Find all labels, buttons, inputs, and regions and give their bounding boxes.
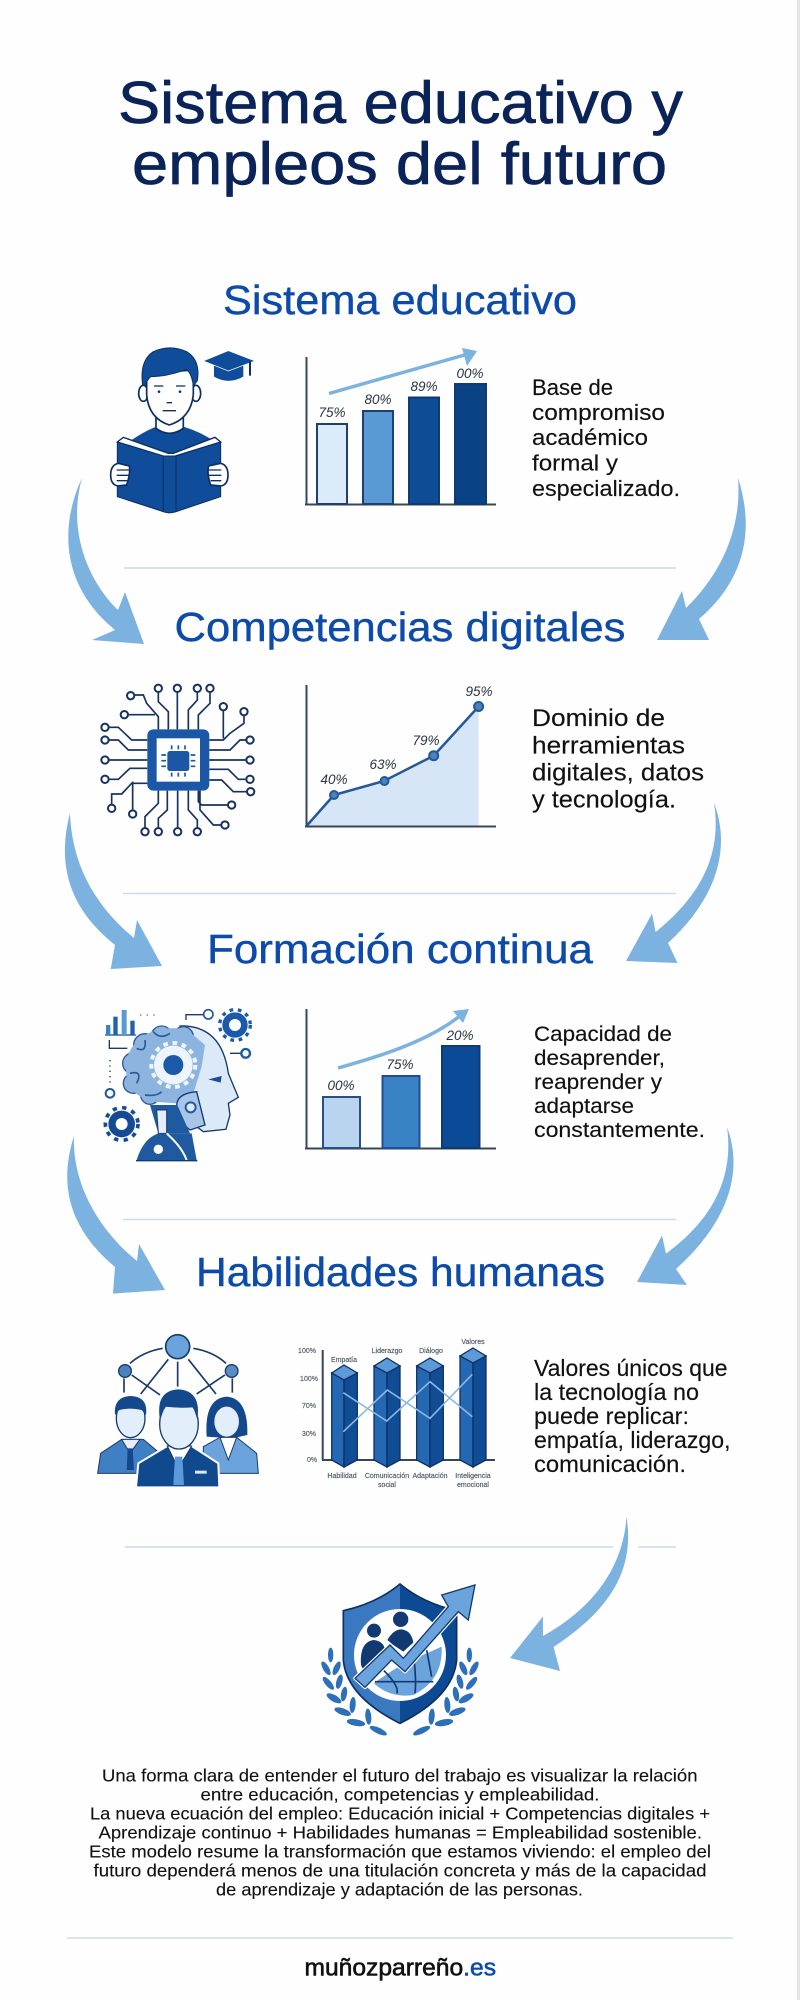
icon: robot head with brain and gears — [105, 1010, 250, 1161]
text: valores unicos: empatía, liderazgo, — [534, 1427, 730, 1453]
bar chart: 3d prisms with crossing lines: Inteligencia — [455, 1473, 491, 1480]
bar chart: rising with arrow: 20% — [445, 1028, 474, 1043]
text: base de compromiso: compromiso — [532, 400, 665, 425]
text: valores unicos — [534, 1355, 730, 1477]
arrow: left, competencias digitales to formacion continua — [65, 813, 162, 969]
heading: sistema educativo: Sistema educativo — [223, 277, 577, 323]
text: valores unicos: la tecnología no — [534, 1379, 699, 1405]
arrow: right, competencias digitales to formacion continua — [626, 803, 721, 963]
heading: habilidades humanas: Habilidades humanas — [196, 1249, 605, 1295]
bar chart: 3d prisms with crossing lines — [298, 1339, 495, 1489]
bar chart: 75 to 90 percent: 00% — [456, 366, 484, 381]
text: capacidad de desaprender: constantemente. — [534, 1118, 705, 1142]
area chart: 40 to 95 percent: 63% — [369, 757, 397, 772]
text: dominio de herramientas — [532, 705, 704, 814]
closing paragraph: La nueva ecuación del empleo: Educación inicial + Competencias digitales + — [90, 1804, 710, 1824]
text: dominio de herramientas: digitales, datos — [532, 760, 704, 786]
arrow: left, sistema educativo to competencias digitales — [68, 478, 144, 644]
bar chart: 3d prisms with crossing lines: emocional — [457, 1482, 489, 1489]
closing paragraph: entre educación, competencias y empleabilidad. — [200, 1784, 600, 1804]
bar chart: 75 to 90 percent: 75% — [318, 405, 346, 420]
arrow: habilidades humanas to badge — [510, 1517, 628, 1671]
bar chart: 3d prisms with crossing lines: Diálogo — [419, 1348, 443, 1355]
bar chart: rising with arrow — [305, 1009, 496, 1149]
bar chart: 3d prisms with crossing lines: Adaptación — [412, 1473, 448, 1480]
bar chart: 3d prisms with crossing lines: Valores — [461, 1339, 485, 1346]
text: base de compromiso: académico — [532, 425, 648, 450]
closing paragraph: de aprendizaje y adaptación de las personas. — [216, 1880, 583, 1900]
panel: formacion continua — [105, 926, 705, 1161]
title — [118, 70, 684, 197]
bar chart: rising with arrow: 75% — [386, 1057, 414, 1072]
bar chart: 3d prisms with crossing lines: 70% — [302, 1403, 316, 1410]
text: valores unicos: Valores únicos que — [534, 1355, 728, 1381]
text: base de compromiso: formal y — [532, 450, 618, 476]
closing paragraph: Este modelo resume la transformación que estamos viviendo: el empleo del — [89, 1842, 711, 1862]
panel: habilidades humanas — [98, 1249, 730, 1489]
closing paragraph: Aprendizaje continuo + Habilidades humanas = Empleabilidad sostenible. — [98, 1822, 702, 1842]
bar chart: 3d prisms with crossing lines: 30% — [302, 1431, 316, 1438]
closing paragraph — [89, 1766, 711, 1900]
text: valores unicos: comunicación. — [534, 1451, 686, 1477]
arrow: left, formacion continua to habilidades humanas — [67, 1136, 165, 1294]
area chart: 40 to 95 percent: 95% — [465, 684, 493, 699]
text: capacidad de desaprender: adaptarse — [534, 1094, 634, 1118]
closing paragraph: futuro dependerá menos de una titulación concreta y más de la capacidad — [94, 1860, 706, 1880]
text: capacidad de desaprender — [534, 1022, 705, 1142]
area chart: 40 to 95 percent — [305, 684, 496, 827]
bar chart: 3d prisms with crossing lines: 100% — [298, 1348, 316, 1355]
icon: student reading a book with graduation cap — [111, 348, 255, 513]
text: capacidad de desaprender: desaprender, — [534, 1046, 665, 1070]
text: base de compromiso: especializado. — [532, 476, 680, 501]
heading: competencias digitales: Competencias digitales — [174, 604, 626, 650]
area chart: 40 to 95 percent: 40% — [320, 772, 348, 787]
bar chart: 75 to 90 percent — [305, 348, 496, 505]
text: dominio de herramientas: Dominio de — [532, 705, 665, 732]
bar chart: 3d prisms with crossing lines: 0% — [307, 1457, 317, 1464]
text: capacidad de desaprender: Capacidad de — [534, 1022, 672, 1046]
title: Sistema educativo y — [118, 70, 684, 136]
bar chart: 3d prisms with crossing lines: Habilidad — [327, 1473, 357, 1480]
bar chart: 3d prisms with crossing lines: Empatía — [331, 1357, 357, 1364]
bar chart: 3d prisms with crossing lines: Liderazgo — [372, 1348, 402, 1355]
text: dominio de herramientas: herramientas — [532, 732, 685, 760]
text: valores unicos: puede replicar: — [534, 1403, 689, 1429]
bar chart: 75 to 90 percent: 80% — [364, 392, 392, 407]
footer brand: muñozparreño.es — [304, 1954, 496, 1982]
text: dominio de herramientas: y tecnología. — [532, 786, 676, 814]
panel: competencias digitales — [101, 604, 704, 835]
bar chart: 3d prisms with crossing lines: 100% — [300, 1376, 318, 1383]
heading: formacion continua: Formación continua — [207, 926, 593, 972]
icon: shield badge with rising arrow, people, globe and laurels — [320, 1584, 480, 1737]
icon: circuit chip — [101, 685, 254, 835]
bar chart: 3d prisms with crossing lines: social — [378, 1482, 396, 1489]
arrow: right, sistema educativo to competencias digitales — [657, 478, 746, 640]
bar chart: 3d prisms with crossing lines: Comunicación — [365, 1473, 409, 1480]
bar chart: 75 to 90 percent: 89% — [410, 379, 438, 394]
arrow: right, formacion continua to habilidades humanas — [637, 1127, 734, 1285]
text: capacidad de desaprender: reaprender y — [534, 1070, 662, 1094]
bar chart: rising with arrow: 00% — [327, 1078, 355, 1093]
text: base de compromiso — [532, 375, 680, 501]
text: base de compromiso: Base de — [532, 375, 613, 400]
panel: sistema educativo — [111, 277, 680, 513]
area chart: 40 to 95 percent: 79% — [412, 733, 440, 748]
closing paragraph: Una forma clara de entender el futuro del trabajo es visualizar la relación — [102, 1766, 697, 1786]
icon: team of people with network — [98, 1335, 258, 1487]
title: empleos del futuro — [132, 131, 667, 197]
